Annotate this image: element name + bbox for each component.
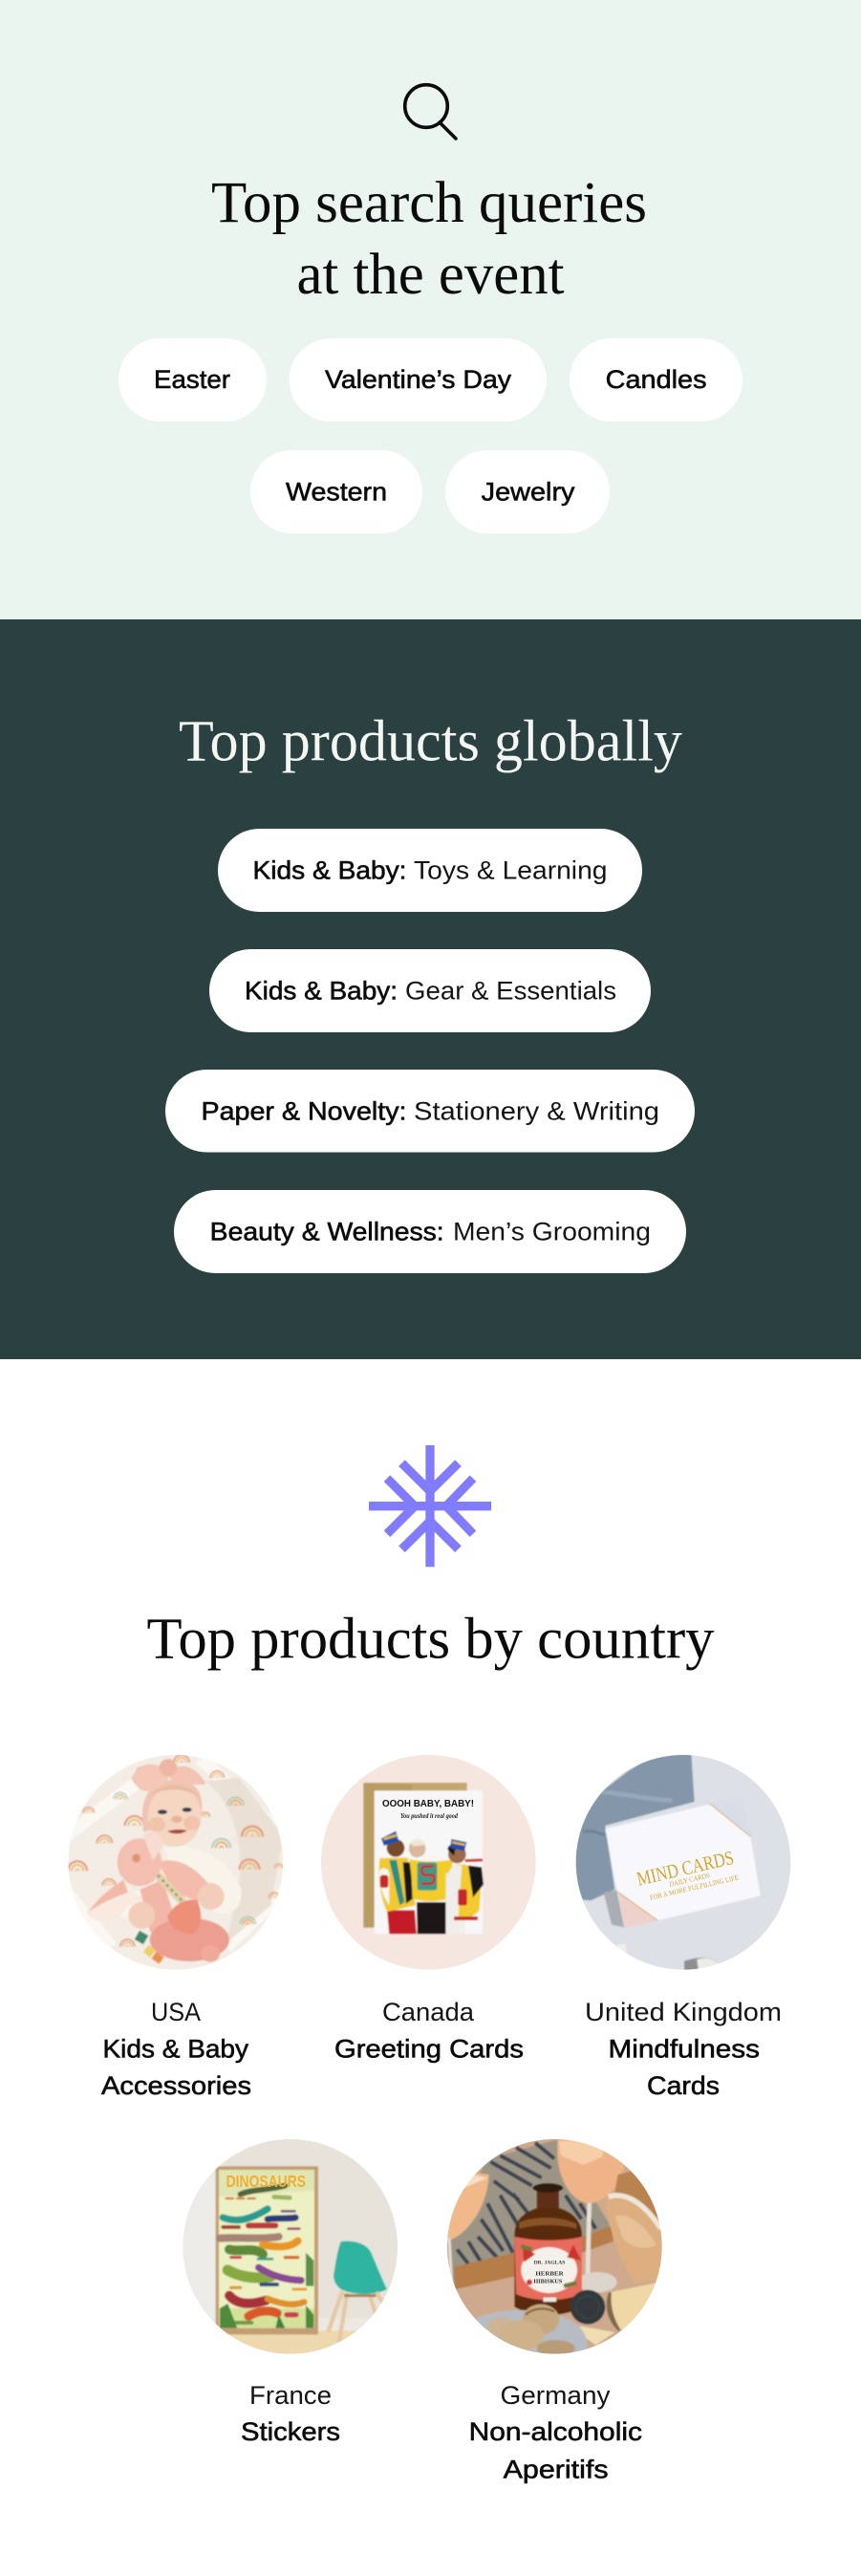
label: Canada xyxy=(334,1998,524,2063)
photo: non-alcoholic aperitif: HIBISKUS xyxy=(533,2278,563,2284)
photo: non-alcoholic aperitif xyxy=(446,2138,666,2363)
photo: non-alcoholic aperitif: DR. JAGLAS xyxy=(534,2261,566,2265)
photo: greeting card: You pushed it real good xyxy=(400,1812,458,1820)
photo: mind cards box xyxy=(573,1752,796,1976)
pill: Easter xyxy=(118,338,267,422)
photo: dinosaur poster xyxy=(182,2138,401,2359)
headband and face xyxy=(142,1780,202,1832)
heading: top products by country: Top products by country xyxy=(147,1608,715,1672)
label: Canada: Greeting Cards xyxy=(334,2034,524,2063)
label: Canada: Canada xyxy=(382,1998,475,2026)
heading: top search queries xyxy=(211,171,647,307)
pill: Paper and Novelty, Stationery and Writing: Paper & Novelty: xyxy=(201,1097,407,1126)
pill: Valentine's Day xyxy=(289,338,547,422)
panel: top products globally xyxy=(0,619,861,1359)
pill: Western: Western xyxy=(286,478,387,507)
photo: mind cards box: DAILY CARDS xyxy=(668,1871,711,1889)
label: United Kingdom xyxy=(585,1998,782,2100)
bottle xyxy=(537,2191,559,2211)
label: Germany: Aperitifs xyxy=(504,2456,609,2484)
pill: Kids and Baby, Gear and Essentials xyxy=(209,949,651,1032)
panel: top products by country xyxy=(69,1445,791,2483)
label: France xyxy=(241,2381,340,2446)
bunny toy xyxy=(87,1893,140,1921)
label: France: France xyxy=(249,2381,332,2410)
pill: Kids and Baby, Toys and Learning: Kids & Baby: xyxy=(252,856,407,885)
pill: Candles: Candles xyxy=(606,365,707,394)
label: USA: Accessories xyxy=(101,2071,251,2100)
pill: Beauty and Wellness, Men's Grooming xyxy=(174,1190,686,1273)
label: United Kingdom: Mindfulness xyxy=(608,2034,760,2063)
photo: non-alcoholic aperitif: HERBER xyxy=(535,2271,564,2278)
photo: greeting card xyxy=(318,1752,542,1976)
label: France: Stickers xyxy=(241,2417,340,2446)
label: United Kingdom: Cards xyxy=(647,2071,720,2100)
pill: Paper and Novelty, Stationery and Writing xyxy=(165,1070,695,1153)
bread xyxy=(614,2171,659,2221)
pill: Valentine's Day: Valentine’s Day xyxy=(325,365,512,394)
panel: top search queries xyxy=(0,0,861,619)
label: USA xyxy=(101,1998,251,2100)
right figure xyxy=(446,1873,466,1934)
licorice disc xyxy=(570,2290,605,2325)
photo: mind cards box: FOR A MORE FULFILLING LIFE xyxy=(649,1872,740,1902)
pill: Kids and Baby, Gear and Essentials: Kids & Baby: xyxy=(245,977,398,1006)
photo: greeting card: OOOH BABY, BABY! xyxy=(382,1799,474,1809)
pill: Jewelry: Jewelry xyxy=(482,478,575,507)
pill: Beauty and Wellness, Men's Grooming: Men’s Grooming xyxy=(453,1218,651,1246)
label: Germany: Non-alcoholic xyxy=(469,2417,642,2446)
photo: dinosaur poster: DINOSAURS xyxy=(226,2172,306,2191)
pill: Kids and Baby, Toys and Learning: Toys & Learning xyxy=(414,856,608,885)
pill: Easter: Easter xyxy=(154,365,230,394)
chair xyxy=(334,2241,387,2294)
label: Germany xyxy=(469,2381,642,2484)
icon: snowflake xyxy=(369,1445,491,1567)
pill: Paper and Novelty, Stationery and Writing: Stationery & Writing xyxy=(414,1097,659,1126)
photo: baby with bunny toy xyxy=(64,1752,287,1976)
label: Germany: Germany xyxy=(501,2381,611,2410)
middle figure xyxy=(417,1902,446,1934)
label: USA: USA xyxy=(151,1998,201,2026)
bow xyxy=(131,1764,168,1791)
onesie xyxy=(233,1887,241,1910)
pill: Beauty and Wellness, Men's Grooming: Beauty & Wellness: xyxy=(210,1218,444,1246)
cheese xyxy=(608,2283,657,2330)
plate and mushrooms xyxy=(475,2308,588,2353)
photo: mind cards box: MIND CARDS xyxy=(635,1848,736,1891)
heading: top search queries: Top search queries xyxy=(211,171,647,235)
pill: Jewelry xyxy=(445,450,610,533)
left glass xyxy=(446,2173,489,2241)
icon: magnifying glass xyxy=(405,85,456,139)
pill: Western xyxy=(250,450,422,533)
heading: top products globally: Top products globally xyxy=(179,710,682,774)
pill: Kids and Baby, Toys and Learning xyxy=(218,829,642,912)
pill: Kids and Baby, Gear and Essentials: Gear & Essentials xyxy=(405,977,616,1006)
left figure xyxy=(387,1910,417,1934)
label: United Kingdom: United Kingdom xyxy=(585,1998,782,2026)
heading: top search queries: at the event xyxy=(296,243,565,307)
big glass xyxy=(557,2139,624,2204)
pill: Candles xyxy=(570,338,743,422)
label: USA: Kids & Baby xyxy=(103,2034,249,2063)
